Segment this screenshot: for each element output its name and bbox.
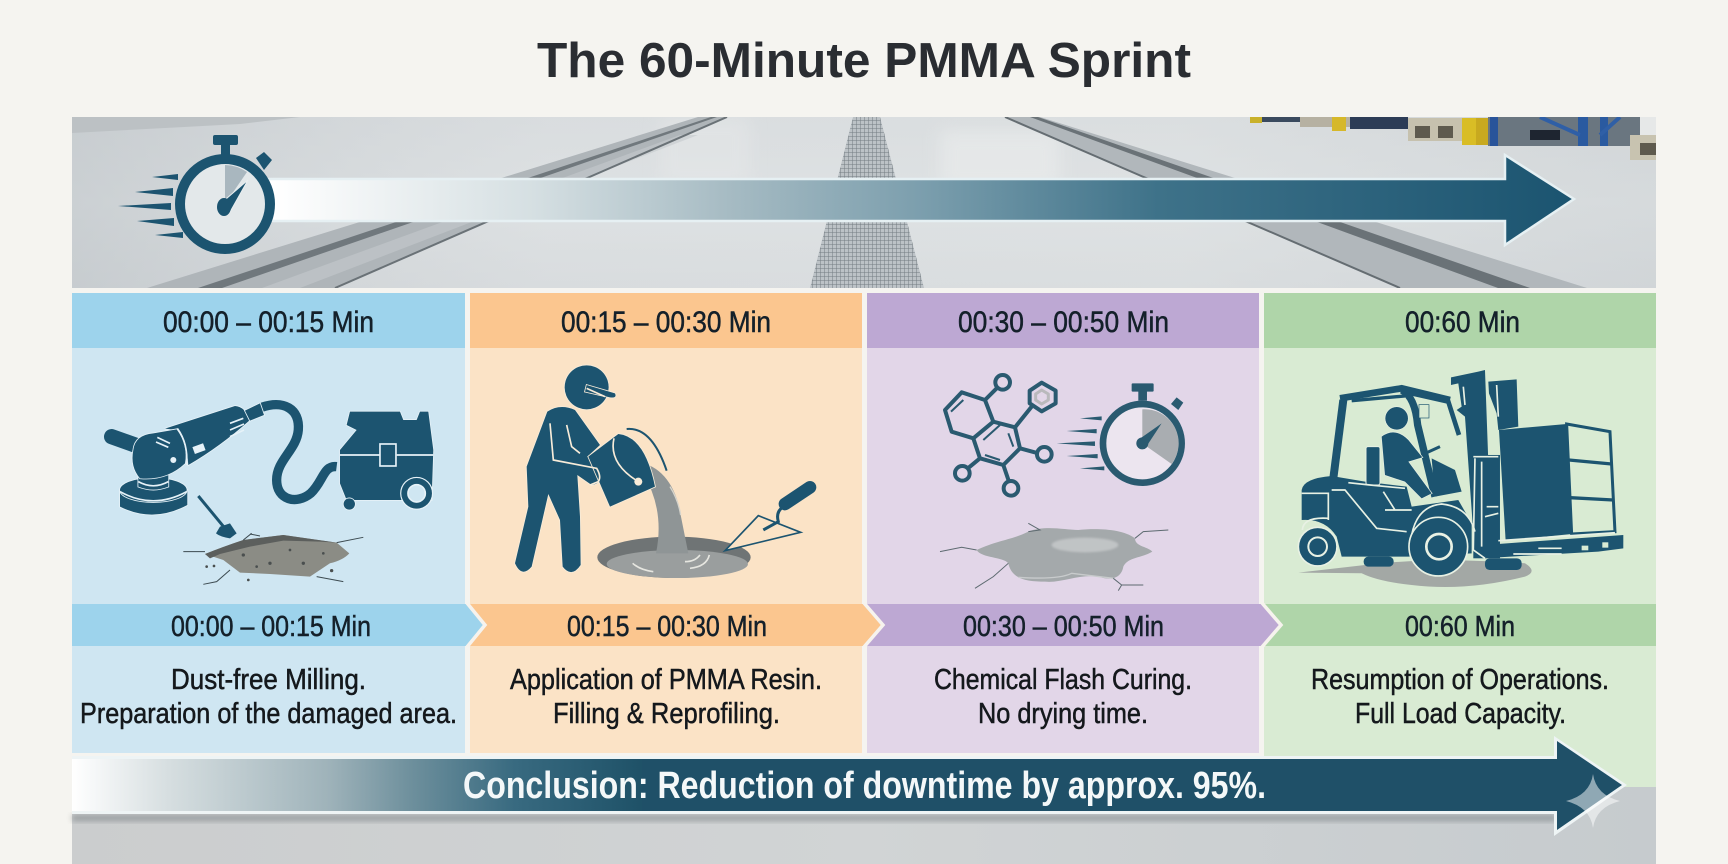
title: The 60-Minute PMMA Sprint (537, 34, 1191, 88)
heading: column time labels: 00:15 – 00:30 Min (561, 306, 771, 339)
heading: band time labels (171, 611, 1515, 643)
band: column 3 time (864, 604, 1281, 646)
right floor rail (1005, 117, 1587, 288)
heading: column time labels (163, 306, 1520, 339)
icon: worker pouring resin (515, 365, 810, 578)
icon: forklift with load (1298, 370, 1623, 587)
chevron edges (467, 603, 1281, 647)
panel: warehouse floor hero (72, 117, 1656, 288)
left floor rail (147, 117, 727, 288)
heading: column time labels: 00:30 – 00:50 Min (958, 306, 1169, 339)
floor strip (72, 758, 1656, 864)
heading: band time labels: 00:15 – 00:30 Min (567, 611, 767, 643)
panel: column 4 green (1264, 293, 1656, 787)
text: step descriptions (80, 664, 1609, 730)
heading: band time labels: 00:00 – 00:15 Min (171, 611, 371, 643)
icon: molecule, stopwatch and cured puddle (940, 375, 1183, 591)
icon: hero stopwatch (118, 135, 272, 249)
panel: column 2 orange (470, 293, 862, 753)
icon: grinder, hose, vacuum and damaged concrete (112, 403, 433, 584)
text: step descriptions: Application of PMMA Resin. (510, 664, 822, 696)
band: column 4 time (1262, 604, 1656, 646)
text: step descriptions: No drying time. (978, 698, 1148, 730)
speed lines (118, 174, 183, 238)
panel: column 3 purple (867, 293, 1259, 753)
heading: column time labels: 00:00 – 00:15 Min (163, 306, 374, 339)
text: step descriptions: Resumption of Operations. (1311, 664, 1609, 696)
text: step descriptions: Dust-free Milling. (171, 664, 366, 696)
text: step descriptions: Filling & Reprofiling. (553, 698, 780, 730)
arrow: conclusion banner (72, 736, 1627, 836)
text: conclusion: Conclusion: Reduction of downtime by approx. 95%. (463, 765, 1266, 807)
text: step descriptions: Full Load Capacity. (1355, 698, 1566, 730)
center floor grating (810, 117, 924, 288)
warehouse background: pallets and racks (1250, 117, 1656, 160)
band: column 1 time (72, 604, 485, 646)
icon: sparkle (1566, 774, 1620, 828)
arrow: timeline progress (250, 155, 1574, 245)
text: step descriptions: Preparation of the damaged area. (80, 698, 457, 730)
heading: band time labels: 00:30 – 00:50 Min (963, 611, 1164, 643)
band: column 2 time (467, 604, 883, 646)
heading: band time labels: 00:60 Min (1405, 611, 1515, 643)
text: step descriptions: Chemical Flash Curing. (934, 664, 1192, 696)
panel: column 1 blue (72, 293, 465, 753)
heading: column time labels: 00:60 Min (1405, 306, 1520, 339)
